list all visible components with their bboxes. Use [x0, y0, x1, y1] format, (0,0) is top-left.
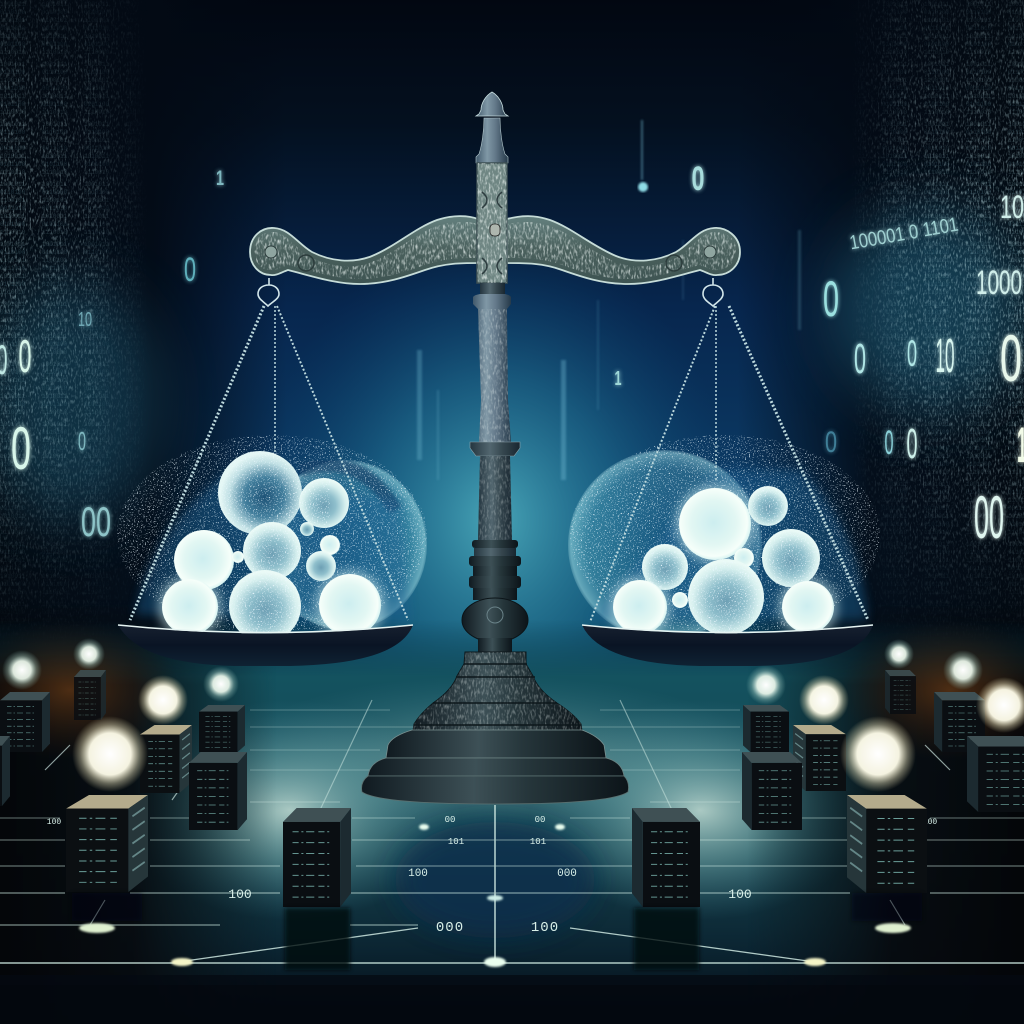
- server racks right: [632, 670, 1024, 907]
- floating binary digits: 0: [907, 333, 917, 374]
- floor binary labels: 100: [531, 920, 559, 936]
- floor binary labels: 100: [728, 887, 752, 902]
- left pan with data spheres: [115, 306, 430, 666]
- floor binary labels: 100: [228, 887, 252, 902]
- floor: [0, 600, 1024, 1024]
- balance scale stand: [250, 92, 740, 804]
- circuit grid lines: [0, 700, 1024, 963]
- blue haze behind data walls: [0, 210, 1024, 520]
- floating binary digits: 0: [11, 415, 31, 482]
- floating binary digits: 0: [906, 420, 918, 468]
- floor binary labels: [47, 815, 937, 936]
- floating binary digits: 0: [854, 335, 866, 383]
- floating binary digits: 0: [18, 330, 32, 382]
- floating binary digits: 0: [825, 426, 837, 459]
- floating binary digits: 1: [216, 167, 224, 190]
- left spheres: [158, 450, 385, 645]
- left glass dome: [115, 430, 430, 630]
- floating binary digits: 1: [614, 368, 622, 390]
- right pan with data spheres: [568, 306, 883, 666]
- floor binary labels: 00: [445, 815, 455, 825]
- floating binary digits: 0: [692, 160, 704, 198]
- right glass dome: [568, 430, 883, 640]
- floating binary digits: 10: [936, 330, 954, 383]
- right chains: [590, 306, 868, 622]
- floating binary digits: 10: [78, 309, 92, 331]
- floating binary digits: 0: [78, 426, 86, 456]
- floating binary digits: 0: [884, 424, 894, 462]
- flared base: [412, 652, 583, 738]
- beam: [250, 216, 740, 284]
- glowing lights above servers: [2, 638, 1024, 792]
- binary data walls left and right: [0, 0, 1024, 660]
- glowing falling data point: [638, 182, 648, 192]
- floor binary labels: 101: [448, 837, 464, 847]
- stepped plinth: [362, 730, 628, 804]
- floor binary labels: 100: [47, 818, 61, 827]
- right spheres: [609, 484, 838, 639]
- floating binary digits: 00: [81, 498, 111, 545]
- right pan dish: [582, 625, 873, 666]
- left pan dish: [118, 625, 413, 666]
- floating binary digits: [0, 160, 1024, 551]
- floating binary digits: 0: [823, 271, 839, 327]
- vignette bottom: [0, 985, 1024, 1024]
- floating binary digits: 100001 0 1101: [848, 214, 960, 254]
- server reflections: [72, 893, 922, 970]
- floor binary labels: 100: [408, 868, 428, 880]
- center plate: [477, 163, 507, 283]
- hanger rings: [258, 278, 723, 306]
- upper column: [469, 283, 521, 600]
- floor binary labels: 000: [436, 920, 464, 936]
- server racks left: [0, 670, 351, 907]
- faint vertical light streaks: [417, 120, 801, 480]
- left chains: [130, 306, 408, 620]
- floor binary labels: 100: [923, 818, 937, 827]
- floor binary labels: 101: [530, 837, 546, 847]
- floating binary digits: 0: [184, 251, 196, 289]
- floor binary labels: 00: [535, 815, 545, 825]
- floor node lights: [79, 824, 911, 967]
- finial: [476, 92, 508, 163]
- floor binary labels: 000: [557, 868, 577, 880]
- bulb knop: [462, 598, 528, 652]
